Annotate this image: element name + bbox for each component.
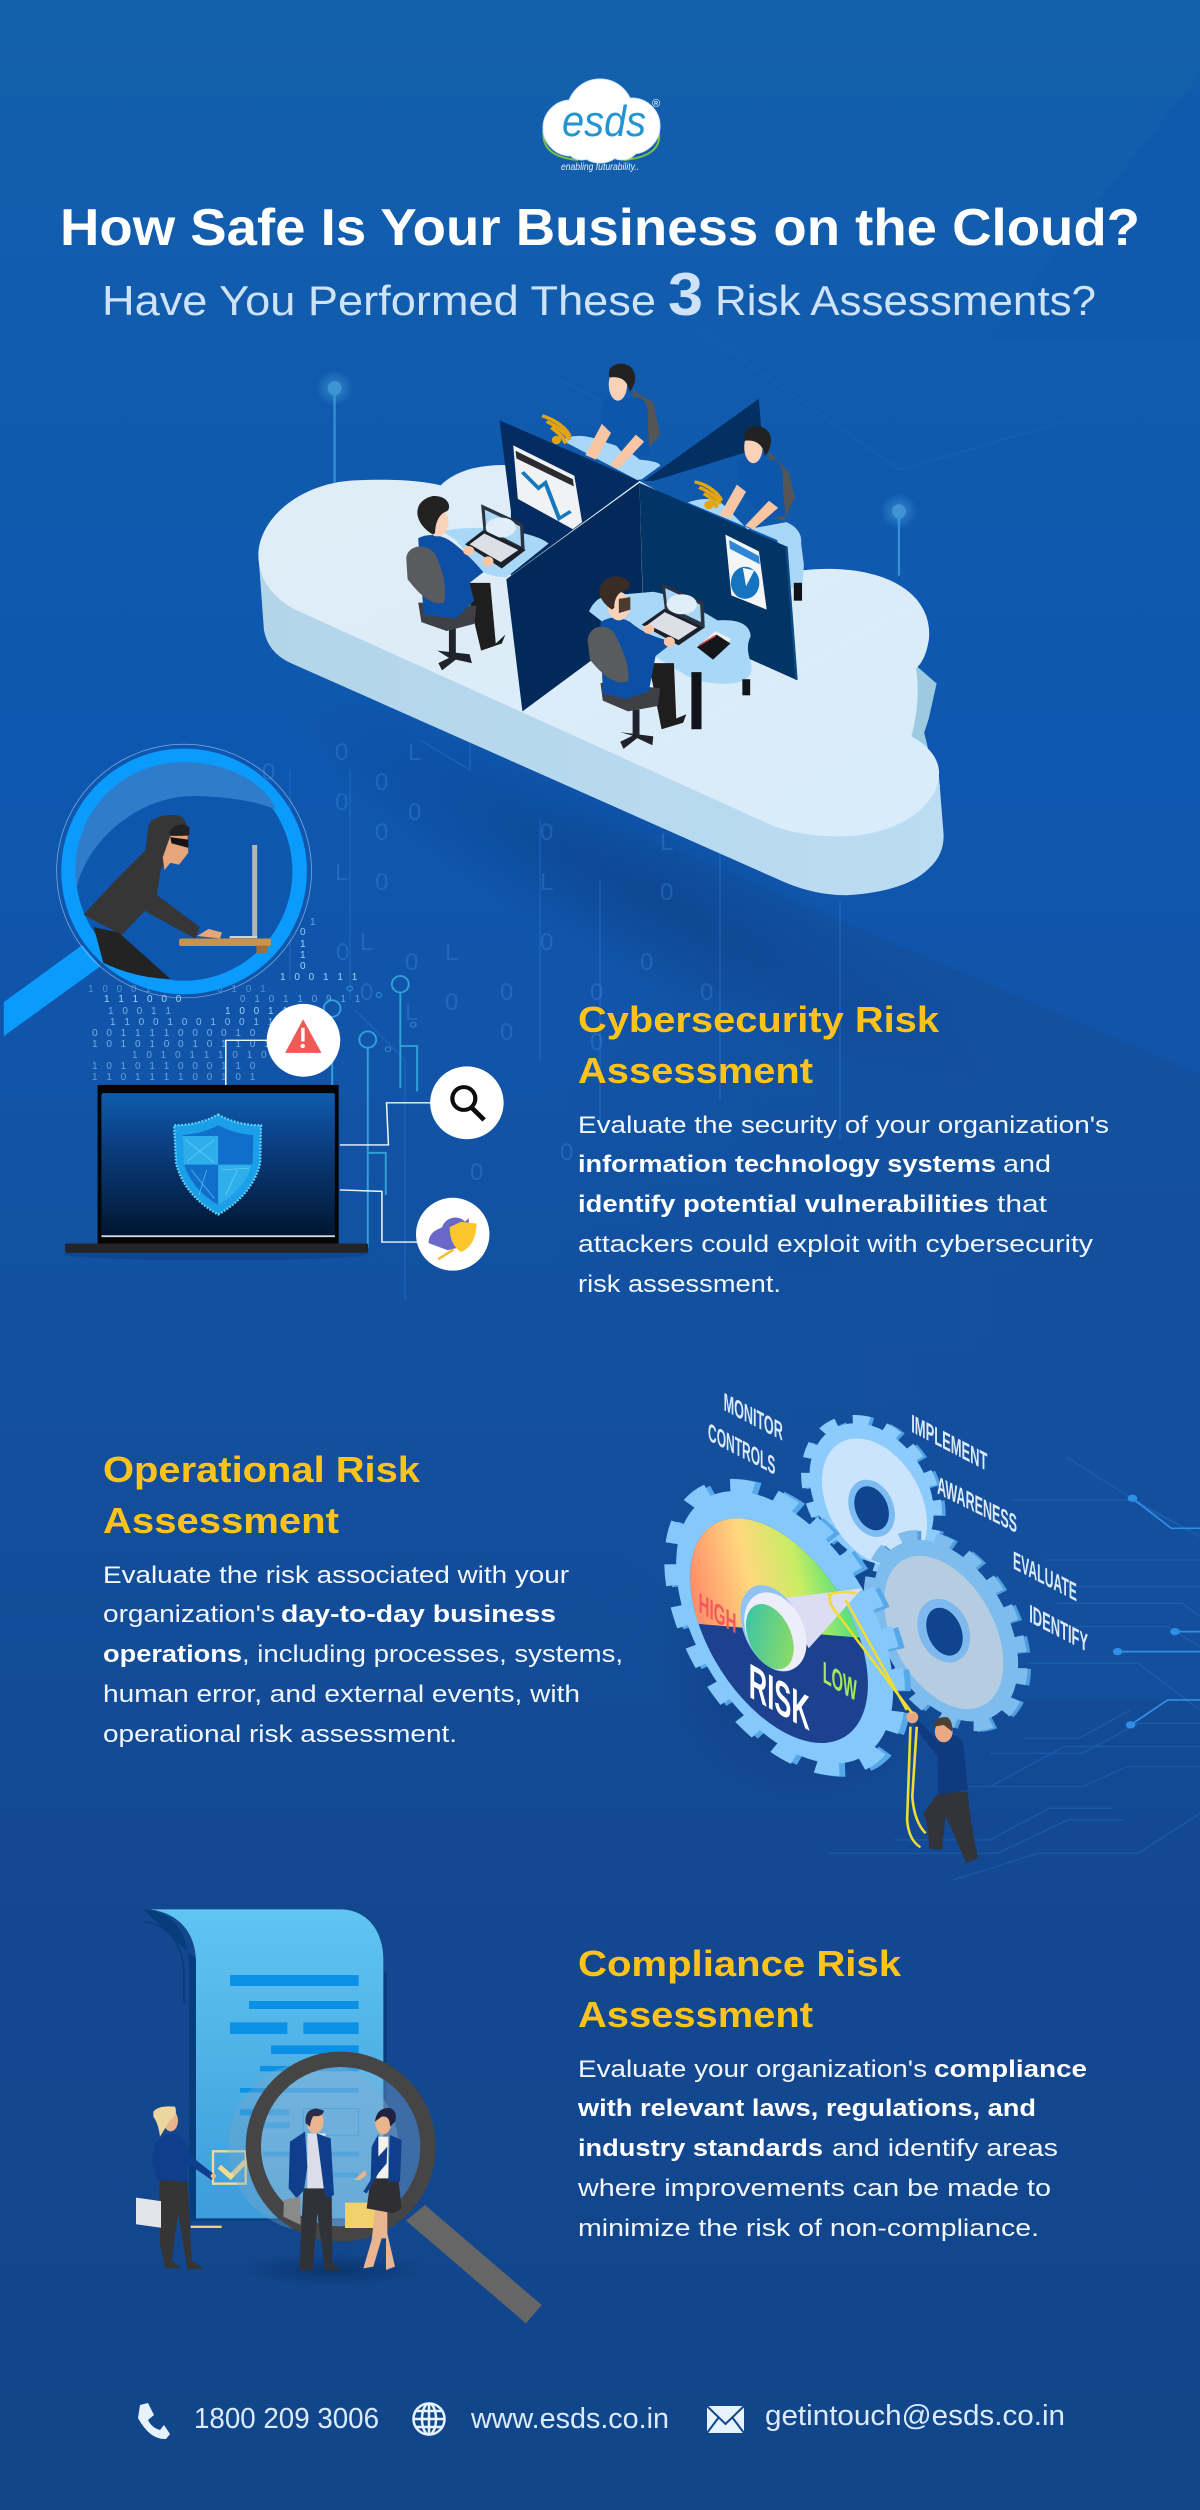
background circuit lines and binary digits: 0 — [336, 939, 349, 966]
background circuit lines and binary digits: 0 — [540, 929, 553, 956]
pie chart poster — [725, 535, 767, 610]
heading: Cybersecurity Risk — [578, 999, 940, 1040]
body text: Evaluate the risk associated with your — [103, 1562, 569, 1589]
subtitle: 3 — [668, 261, 703, 328]
background circuit lines and binary digits — [88, 330, 1070, 1300]
body text: operations — [103, 1641, 242, 1668]
background circuit lines and binary digits: 0 — [590, 979, 603, 1006]
person centre — [283, 2108, 341, 2271]
gear labels: IMPLEMENT — [911, 1410, 988, 1478]
background circuit lines and binary digits: 0 — [408, 799, 421, 826]
background circuit lines and binary digits: 0 0 1 1 1 1 0 0 0 0 1 0 — [92, 1028, 258, 1039]
logo: esds cloud: ® — [652, 98, 660, 110]
heading — [578, 1943, 902, 2035]
worker front — [588, 576, 752, 749]
gear right — [840, 1514, 1055, 1748]
risk gears illustration — [626, 1388, 1200, 1880]
gauge labels: RISK — [749, 1652, 810, 1741]
icon: cloud lock and key — [416, 1198, 489, 1271]
background circuit lines and binary digits: 1 1 0 0 1 0 0 1 0 0 1 1 1 1 0 — [110, 1017, 319, 1028]
cubicle partitions front — [506, 483, 797, 711]
risk gears illustration: LOW — [823, 1656, 857, 1709]
background circuit lines and binary digits: L — [445, 939, 458, 966]
background circuit lines and binary digits: L — [405, 999, 418, 1026]
body text: industry standards — [578, 2135, 823, 2162]
background circuit lines and binary digits: 0 — [660, 879, 673, 906]
connector lines — [226, 976, 431, 1249]
section: compliance risk assessment — [577, 1943, 1087, 2242]
background circuit lines and binary digits: L — [540, 869, 553, 896]
background circuit lines and binary digits: 0 — [500, 1019, 513, 1046]
background circuit lines and binary digits: 0 — [640, 949, 653, 976]
phone number: 1800 209 3006 — [194, 2403, 379, 2435]
background circuit lines and binary digits: 0 — [375, 819, 388, 846]
body text: and identify areas — [832, 2135, 1058, 2162]
background circuit lines and binary digits: 1 0 1 0 1 1 0 0 0 1 1 0 — [92, 1061, 258, 1072]
background circuit lines and binary digits: 0 — [440, 1079, 453, 1106]
body text: human error, and external events, with — [103, 1681, 580, 1708]
person left — [136, 2106, 216, 2270]
background circuit lines and binary digits: 1 0 0 1 1 — [108, 1006, 174, 1017]
body text: information technology systems — [578, 1151, 996, 1178]
gear back — [783, 1401, 964, 1588]
background circuit lines and binary digits: L — [660, 829, 673, 856]
background circuit lines and binary digits: 0 — [405, 949, 418, 976]
worker top — [542, 364, 660, 480]
body text: and — [1003, 1151, 1051, 1178]
glowing nodes — [316, 370, 917, 576]
body text: identify potential vulnerabilities — [578, 1191, 989, 1218]
body text: Evaluate the security of your organization's — [578, 1112, 1109, 1139]
background circuit lines and binary digits: 1 1 1 0 0 0 — [104, 994, 184, 1005]
body text: minimize the risk of non-compliance. — [578, 2215, 1039, 2242]
hacker — [83, 815, 271, 979]
section: operational risk assessment — [103, 1449, 623, 1748]
document — [143, 1909, 433, 2287]
magnifying glass — [228, 2059, 542, 2323]
background circuit lines and binary digits: 0 — [445, 989, 458, 1016]
chart poster — [513, 445, 582, 529]
background circuit lines and binary digits: 0 — [590, 1029, 603, 1056]
man pulling ropes — [827, 1592, 978, 1863]
heading — [578, 999, 940, 1091]
background circuit lines and binary digits: 0 1 0 1 1 0 9 1 1 — [240, 994, 363, 1005]
logo: esds cloud: enabling futurability.. — [561, 162, 639, 173]
heading: Assessment — [578, 1050, 813, 1091]
body text: with relevant laws, regulations, and — [577, 2095, 1036, 2122]
logo: esds cloud: esds — [562, 97, 646, 146]
cloud platform — [258, 465, 944, 895]
gauge needle — [728, 1577, 862, 1679]
hero illustration: office on a cloud — [258, 364, 944, 895]
background circuit lines and binary digits: 0 — [375, 769, 388, 796]
background circuit lines and binary digits: 0 — [262, 809, 275, 836]
hacker magnifying glass — [4, 744, 312, 1036]
background circuit lines and binary digits: L — [360, 929, 373, 956]
body text — [103, 1562, 623, 1748]
body text: where improvements can be made to — [577, 2175, 1051, 2202]
lens — [57, 744, 312, 998]
body text: that — [997, 1191, 1047, 1218]
circuit lines — [827, 1457, 1200, 1880]
background circuit lines and binary digits: 1 0 0 1 1 1 — [225, 1006, 305, 1017]
compliance illustration — [136, 1909, 542, 2323]
background circuit lines and binary digits: 0 — [335, 789, 348, 816]
icon: envelope — [707, 2406, 744, 2433]
background circuit lines and binary digits: 1 — [310, 917, 316, 928]
background circuit lines and binary digits: 0 — [470, 1159, 483, 1186]
background circuit lines and binary digits: 0 — [300, 927, 306, 938]
background circuit lines and binary digits: 1 0 0 1 1 1 — [280, 972, 360, 983]
gear labels: EVALUATE — [1013, 1546, 1077, 1608]
heading — [103, 1449, 421, 1541]
icon: globe — [414, 2404, 444, 2434]
background circuit lines and binary digits: 0 — [700, 979, 713, 1006]
website: www.esds.co.in — [470, 2403, 669, 2435]
worker right — [688, 426, 804, 601]
worker left — [406, 496, 549, 670]
gear main with gauge — [664, 1478, 911, 1777]
gear labels: MONITOR — [724, 1388, 783, 1447]
background circuit lines and binary digits: L — [335, 859, 348, 886]
body text: attackers could exploit with cybersecurity — [578, 1231, 1093, 1258]
background circuit lines and binary digits: 0 — [335, 739, 348, 766]
section: cybersecurity risk assessment — [578, 999, 1109, 1298]
subtitle: Risk Assessments? — [715, 277, 1096, 324]
title: How Safe Is Your Business on the Cloud? — [60, 199, 1140, 257]
email: getintouch@esds.co.in — [765, 2400, 1065, 2432]
background circuit lines and binary digits: 0 — [500, 979, 513, 1006]
background circuit lines and binary digits: 0 — [262, 759, 275, 786]
laptop — [63, 1085, 369, 1260]
footer contact bar — [138, 2400, 1065, 2439]
background circuit lines and binary digits: 1 — [300, 939, 306, 950]
person right — [345, 2108, 402, 2270]
heading: Compliance Risk — [578, 1943, 902, 1984]
background circuit lines and binary digits: 0 — [540, 819, 553, 846]
icon: alert — [267, 1004, 340, 1077]
background circuit lines and binary digits: 0 — [560, 1139, 573, 1166]
risk gears illustration: IDENTIFY — [1029, 1600, 1088, 1658]
magnifier handle — [4, 945, 100, 1036]
background circuit lines and binary digits: 1 0 1 0 1 1 1 0 1 0 0 1 — [132, 1050, 298, 1061]
background circuit lines and binary digits: 1 — [300, 950, 306, 961]
heading: Assessment — [578, 1994, 813, 2035]
body text: compliance — [934, 2056, 1087, 2083]
icon: phone — [138, 2403, 170, 2439]
checkbox — [213, 2151, 246, 2184]
subtitle: Have You Performed These — [102, 277, 656, 324]
body text: risk assessment. — [578, 1271, 781, 1298]
background circuit lines and binary digits: 1 0 0 0 1 0 1 1 0 0 1 0 1 — [88, 984, 269, 995]
body text: operational risk assessment. — [103, 1721, 457, 1748]
gear shadow — [650, 1507, 960, 1800]
background circuit lines and binary digits: 0 — [300, 961, 306, 972]
body text: Evaluate your organization's — [578, 2056, 927, 2083]
gear labels: CONTROLS — [708, 1418, 775, 1481]
cubicle partitions back — [499, 399, 763, 576]
background circuit lines and binary digits: 1 1 0 1 1 1 1 0 0 1 0 1 — [92, 1072, 258, 1083]
background circuit lines and binary digits: 0 — [375, 869, 388, 896]
body text: , including processes, systems, — [242, 1641, 623, 1668]
body text — [578, 1112, 1109, 1298]
body text: day-to-day business — [281, 1601, 556, 1628]
heading: Operational Risk — [103, 1449, 421, 1490]
heading: Assessment — [103, 1500, 339, 1541]
gauge labels: HIGH — [698, 1586, 737, 1640]
background circuit lines and binary digits: 0 — [360, 979, 373, 1006]
background circuit lines and binary digits: 1 0 1 0 1 0 0 1 0 1 1 0 1 — [92, 1039, 273, 1050]
shield — [174, 1115, 261, 1215]
background circuit lines and binary digits: L — [408, 739, 421, 766]
body text — [577, 2056, 1087, 2242]
logo: esds cloud — [543, 79, 660, 173]
subtitle — [102, 261, 1096, 328]
body text: organization's — [103, 1601, 275, 1628]
gauge labels — [698, 1586, 857, 1741]
icon: search — [430, 1066, 504, 1139]
gear labels — [708, 1388, 1088, 1658]
gear labels: AWARENESS — [937, 1471, 1017, 1539]
laptop with shield and icons — [63, 976, 504, 1271]
